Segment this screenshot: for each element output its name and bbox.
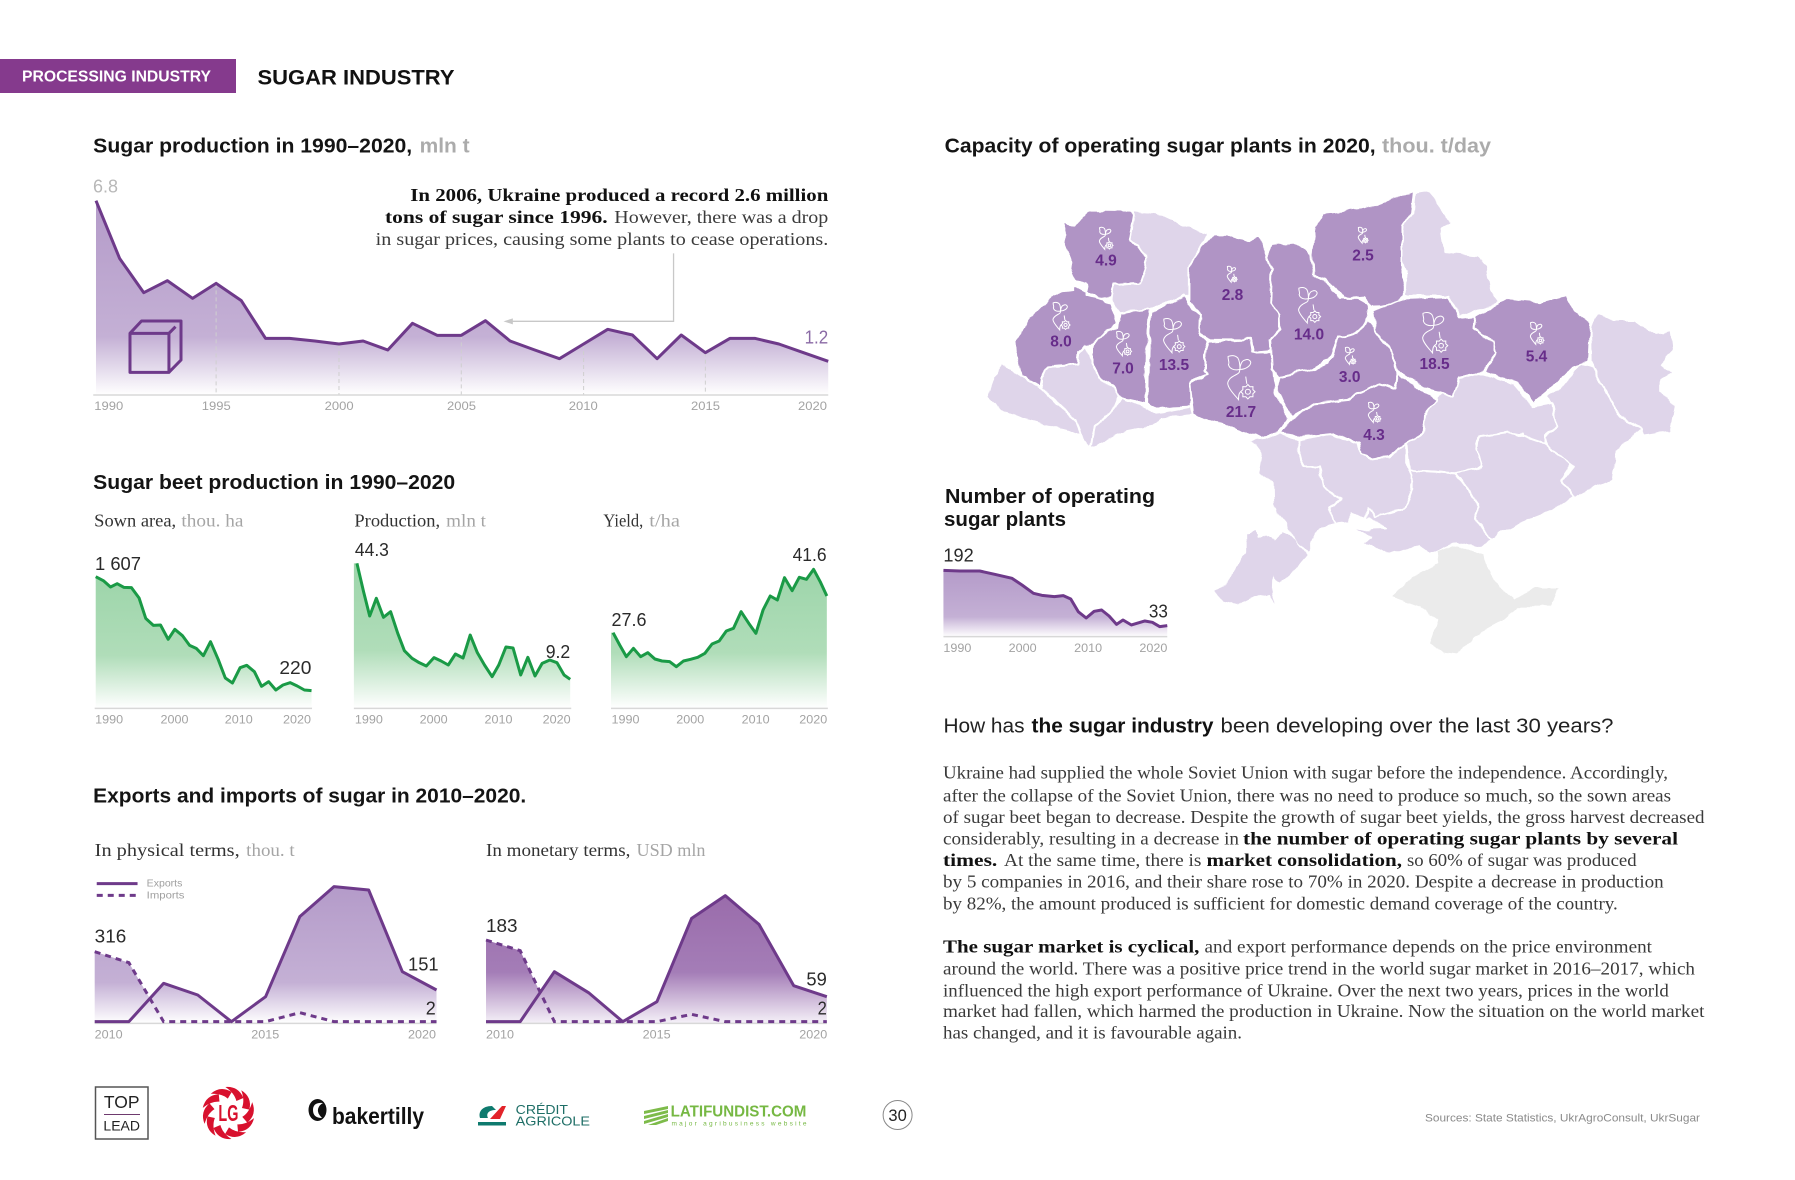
plants values and axis: 2010 [1074, 641, 1103, 655]
question heading: the sugar industry [1032, 714, 1214, 737]
logo: LG [199, 1083, 258, 1143]
crimea [1392, 545, 1559, 653]
text block: paragraph one: of sugar beet began to decrease. Despite the growth of sugar beet yields, the gross harvest decreased [943, 807, 1704, 827]
logo: Baker Tilly [308, 1099, 424, 1129]
chart: sown area: 2010 [225, 712, 253, 726]
heading: number of plants: Number of operating [945, 486, 1155, 508]
logo: LG: LG [218, 1100, 238, 1126]
chart: yield: 2010 [742, 712, 770, 726]
text block: paragraph one: Ukraine had supplied the whole Soviet Union with sugar before the independence. Accordingly, [943, 762, 1668, 782]
icons: sugar beet with gear [1053, 227, 1544, 422]
text block: paragraph one: after the collapse of the Soviet Union, there was no need to produce so much, so the sown areas [943, 786, 1671, 806]
plants values and axis: 33 [1149, 601, 1168, 621]
chart: physical terms: 2 [426, 999, 436, 1019]
chart: physical terms: thou. t [246, 840, 295, 860]
last value: 1.2 [805, 328, 828, 348]
light regions east [1400, 190, 1675, 498]
region values: 2.8 [1222, 287, 1244, 304]
page title: SUGAR INDUSTRY [258, 66, 454, 89]
region values: 7.0 [1112, 361, 1134, 378]
chart: physical terms: 316 [95, 927, 126, 947]
chart: monetary terms: 2 [818, 999, 827, 1019]
axis labels [94, 399, 827, 413]
panel: sugar production chart [93, 136, 828, 413]
callout: 2006 record: in sugar prices, causing some plants to cease operations. [376, 229, 828, 249]
panel: exports and imports [93, 786, 828, 1041]
chart: beet output: mln t [446, 511, 486, 531]
heading: sugar production: mln t [420, 136, 470, 158]
chart: sown area: 220 [279, 658, 311, 678]
callout: 2006 record [376, 185, 828, 249]
text block: paragraph two: has changed, and it is favourable again. [943, 1023, 1242, 1043]
text block: paragraph one: considerably, resulting in a decrease in [943, 829, 1239, 849]
chart: sown area [94, 511, 312, 726]
logo: Top Lead: TOP [104, 1092, 140, 1112]
chart: sown area: 2000 [160, 712, 189, 726]
chart: monetary terms: In monetary terms, [486, 840, 630, 860]
logo: Credit Agricole: CRÉDIT [516, 1102, 568, 1117]
text block: paragraph two: market had fallen, which harmed the production in Ukraine. Now the situation on the world market [943, 1001, 1704, 1021]
text block: paragraph one: by 82%, the amount produced is sufficient for domestic demand coverage of the country. [943, 893, 1618, 913]
axis labels: 2000 [325, 399, 354, 413]
axis labels: 2015 [691, 399, 720, 413]
region values: 4.3 [1363, 427, 1385, 444]
chart: beet output: 9.2 [546, 642, 570, 662]
chart: beet output: 44.3 [355, 540, 389, 560]
heading: capacity of sugar plants: thou. t/day [1382, 136, 1492, 158]
chart: yield: 27.6 [612, 610, 646, 630]
heading: number of plants [944, 486, 1155, 531]
logo: Latifundist: major agribusiness website [672, 1120, 807, 1128]
heading: capacity of sugar plants: Capacity of operating sugar plants in 2020, [945, 136, 1376, 158]
chart: beet output: 1990 [355, 712, 383, 726]
text block: paragraph two: influenced the high export performance of Ukraine. Over the next two years, prices in the world [943, 980, 1669, 1000]
footer logos [96, 1083, 807, 1143]
map regions with organic borders [987, 190, 1675, 653]
callout: 2006 record: tons of sugar since 1996. [385, 207, 608, 227]
chart: yield: 2000 [676, 712, 705, 726]
regions west and centre [987, 190, 1591, 458]
plants values and axis [943, 546, 1168, 655]
region values: 8.0 [1050, 334, 1072, 351]
chart: yield: 2020 [799, 712, 828, 726]
legend: exports and imports: Imports [147, 890, 184, 902]
chart: sown area: Sown area, [94, 511, 176, 531]
arrow: callout to 2006 peak [504, 253, 674, 324]
chart: sown area: 2020 [283, 712, 311, 726]
region values: 3.0 [1339, 369, 1360, 386]
region values: 5.4 [1526, 349, 1548, 366]
logo: Top Lead [96, 1087, 148, 1139]
page number [883, 1100, 912, 1130]
legend: exports and imports: Exports [147, 878, 182, 890]
heading: exports and imports: Exports and imports of sugar in 2010–2020. [93, 786, 526, 808]
panel: sugar beet production [93, 472, 828, 726]
chart: yield: t/ha [649, 511, 680, 531]
area chart: sugar production [93, 201, 828, 395]
sources note: Sources: State Statistics, UkrAgroConsult, UkrSugar [1425, 1113, 1700, 1125]
region values: 13.5 [1159, 357, 1189, 374]
logo: Baker Tilly: bakertilly [332, 1103, 424, 1129]
chart: beet output: 2000 [420, 712, 448, 726]
axis labels: 2020 [798, 399, 827, 413]
chart: monetary terms: 2020 [799, 1027, 828, 1041]
chart: sown area: thou. ha [181, 511, 243, 531]
question heading [944, 714, 1614, 737]
text block: paragraph two [943, 937, 1704, 1043]
chart: monetary terms: 2015 [643, 1027, 671, 1041]
text block: paragraph two: and export performance depends on the price environment [1204, 937, 1652, 957]
plants values and axis: 2000 [1009, 641, 1037, 655]
text block: paragraph one: the number of operating sugar plants by several [1243, 829, 1678, 849]
region values [1050, 248, 1548, 444]
region values: 18.5 [1420, 356, 1450, 373]
icon: sugar cube [130, 321, 181, 372]
axis labels: 2010 [569, 399, 598, 413]
chart: yield: 41.6 [793, 545, 827, 565]
callout: 2006 record: However, there was a drop [614, 207, 828, 227]
plants values and axis: 1990 [943, 641, 972, 655]
axis labels: 1990 [94, 399, 124, 413]
chart: sown area: 1990 [95, 712, 124, 726]
chart: physical terms: In physical terms, [95, 840, 240, 860]
plants values and axis: 192 [943, 546, 974, 566]
panel: number of operating sugar plants [943, 486, 1168, 655]
callout: 2006 record: In 2006, Ukraine produced a record 2.6 million [410, 185, 828, 205]
axis labels: 1995 [202, 399, 231, 413]
text block: paragraph one: so 60% of sugar was produced [1407, 850, 1637, 870]
text block: paragraph two: The sugar market is cyclical, [943, 937, 1199, 957]
logo: Credit Agricole [478, 1102, 590, 1128]
chart: yield: 1990 [612, 712, 640, 726]
chart: physical terms [95, 840, 439, 1041]
heading: number of plants: sugar plants [944, 509, 1066, 531]
chart: yield [603, 511, 828, 726]
chart: monetary terms: 59 [806, 970, 827, 990]
region values: 2.5 [1352, 248, 1374, 265]
chart: physical terms: 2010 [95, 1027, 123, 1041]
axis labels: 2005 [447, 399, 476, 413]
chart: physical terms: 151 [408, 955, 439, 975]
heading: sugar production: Sugar production in 1990–2020, [93, 136, 412, 158]
chart: sown area: 1 607 [95, 554, 141, 574]
chart: monetary terms: 2010 [486, 1027, 514, 1041]
question heading: been developing over the last 30 years? [1220, 714, 1614, 737]
chart: beet output: 2020 [543, 712, 571, 726]
text block: paragraph one: market consolidation, [1206, 850, 1402, 870]
region values: 4.9 [1095, 253, 1117, 270]
logo: Latifundist [644, 1104, 807, 1128]
chart: monetary terms [486, 840, 828, 1041]
area chart: plants [943, 570, 1167, 637]
region values: 21.7 [1226, 404, 1256, 421]
choropleth map of Ukraine [987, 190, 1675, 653]
logo: Credit Agricole: AGRICOLE [516, 1114, 590, 1128]
chart: monetary terms: USD mln [636, 840, 706, 860]
region values: 14.0 [1294, 326, 1324, 343]
header badge: processing industry: PROCESSING INDUSTRY [22, 69, 211, 86]
text block: paragraph one: times. [943, 850, 997, 870]
legend: exports and imports [97, 878, 184, 902]
chart: beet output: Production, [354, 511, 440, 531]
text block: paragraph two: around the world. There was a positive price trend in the world sugar market in 2016–2017, which [943, 958, 1695, 978]
text block: paragraph one [943, 762, 1704, 913]
plants values and axis: 2020 [1139, 641, 1168, 655]
chart: physical terms: 2020 [408, 1027, 436, 1041]
chart: monetary terms: 183 [486, 916, 518, 936]
logo: Top Lead: LEAD [103, 1118, 140, 1134]
heading: sugar beet production: Sugar beet production in 1990–2020 [93, 472, 455, 494]
page number: 30 [888, 1107, 907, 1125]
chart: physical terms: 2015 [251, 1027, 280, 1041]
light regions south [1215, 433, 1573, 653]
first value: 6.8 [93, 177, 118, 197]
chart: beet output: 2010 [484, 712, 513, 726]
header badge: processing industry [0, 59, 236, 93]
text block: paragraph one: by 5 companies in 2016, and their share rose to 70% in 2020. Despite a decrease in production [943, 872, 1664, 892]
chart: beet output [354, 511, 571, 726]
logo: Latifundist: LATIFUNDIST.COM [671, 1104, 806, 1121]
question heading: How has [944, 714, 1024, 737]
chart: yield: Yield, [603, 511, 643, 531]
text block: paragraph one: At the same time, there is [1004, 850, 1201, 870]
